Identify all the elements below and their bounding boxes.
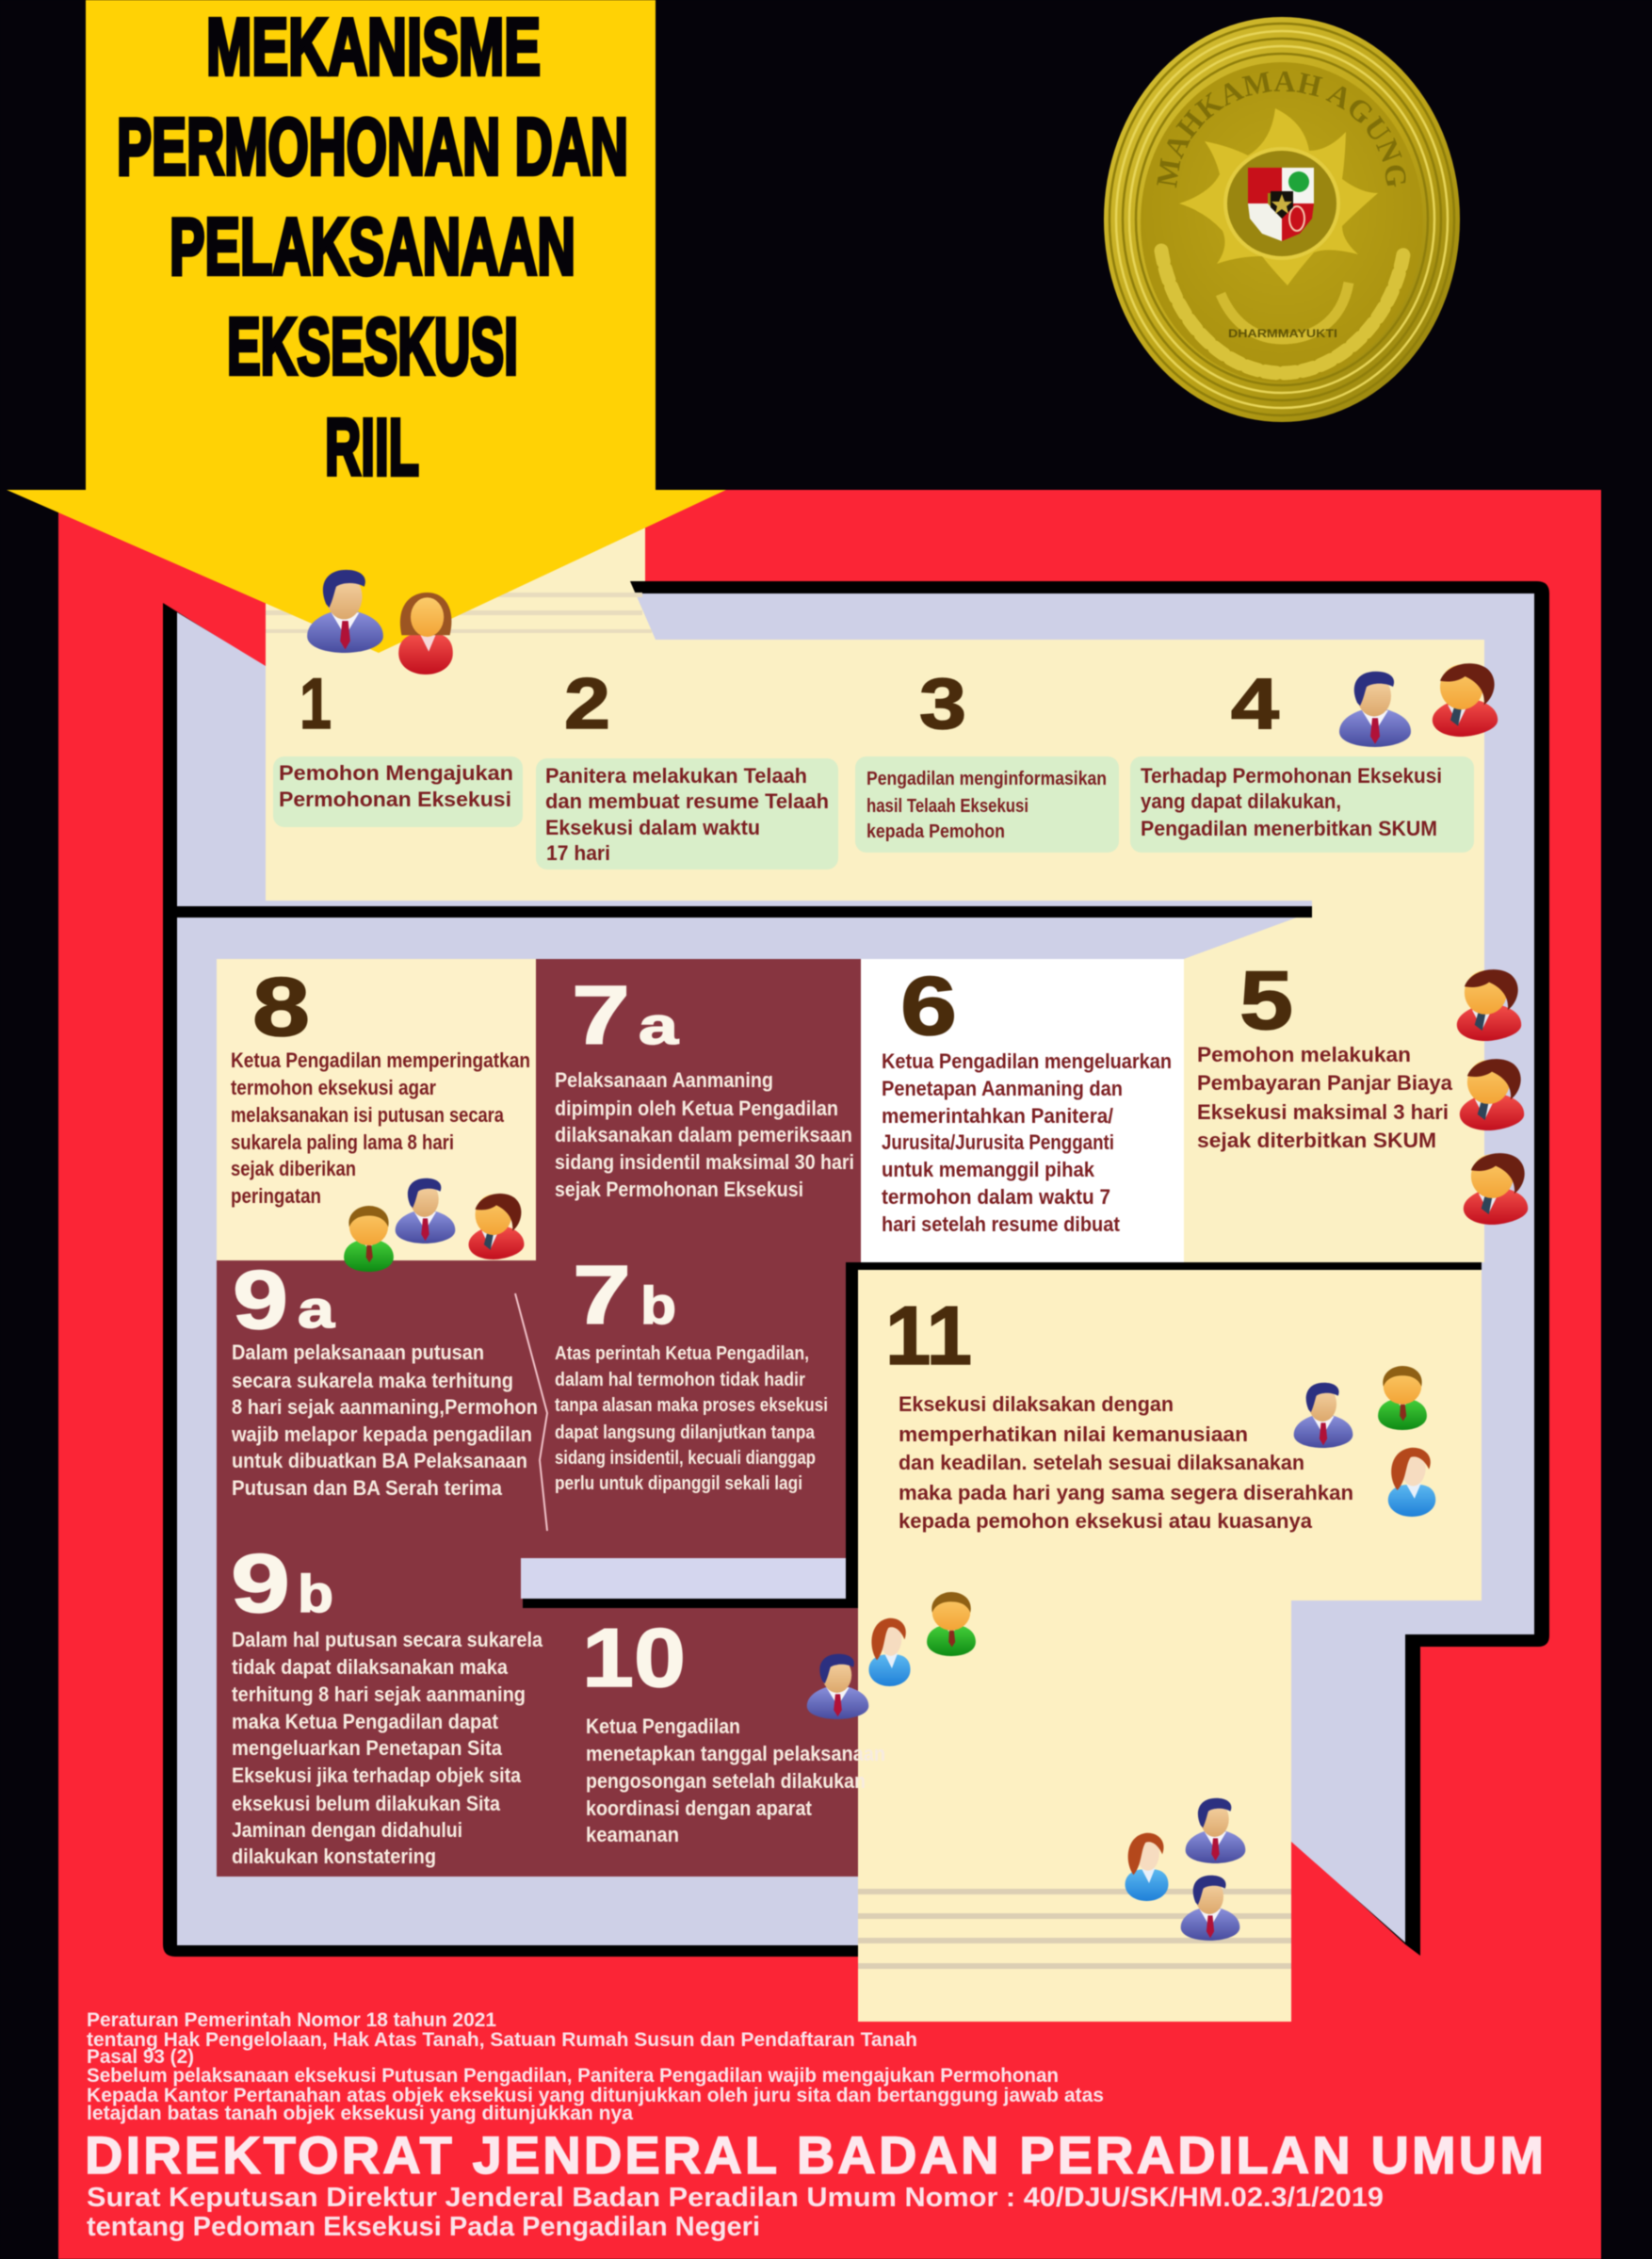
description: Atas perintah Ketua Pengadilan, <box>555 1343 809 1364</box>
icon: applicant pair at arrow tip <box>307 570 453 674</box>
footer reference text: Surat Keputusan Direktur Jenderal Badan Peradilan Umum Nomor : 40/DJU/SK/HM.02.3/1/2019 <box>87 2183 1384 2213</box>
description: dipimpin oleh Ketua Pengadilan <box>555 1097 838 1120</box>
inner motto ribbon <box>1221 283 1349 339</box>
maroon block top <box>536 959 861 1262</box>
number 5: 5 <box>1239 953 1293 1047</box>
panel: step 9b <box>231 1536 543 1868</box>
panel: step 1 <box>273 664 523 827</box>
title text: PELAKSANAAN <box>170 203 575 292</box>
description <box>231 1341 538 1500</box>
decorative stripes under arrow <box>266 593 652 633</box>
seal lettering path <box>1177 91 1386 188</box>
cream area: step 11 <box>858 1270 1482 2022</box>
description: tidak dapat dilaksanakan maka <box>232 1655 509 1679</box>
description: pengosongan setelah dilakukan <box>586 1769 866 1793</box>
description: perlu untuk dipanggil sekali lagi <box>555 1473 802 1494</box>
description: hasil Telaah Eksekusi <box>866 796 1028 817</box>
legal note text: Peraturan Pemerintah Nomor 18 tahun 2021 <box>87 2009 496 2031</box>
icons: three persons <box>1294 1366 1435 1517</box>
box: step 8 background <box>217 959 536 1260</box>
description: keamanan <box>586 1823 679 1846</box>
panel: step 11 <box>885 1289 1435 1533</box>
description <box>586 1715 885 1846</box>
title text: PERMOHONAN DAN <box>117 103 628 192</box>
description: dan membuat resume Telaah <box>545 789 829 813</box>
text box <box>855 756 1119 853</box>
description <box>279 761 513 811</box>
number 9b <box>231 1536 333 1630</box>
text box <box>273 756 523 827</box>
number 9b: 9 <box>231 1536 290 1630</box>
description: dalam hal termohon tidak hadir <box>555 1370 805 1390</box>
footer reference text <box>87 2183 1384 2242</box>
shield: red quarter with chain <box>1282 203 1314 241</box>
black frame outline <box>163 581 1549 1957</box>
seal outer disc <box>1104 17 1460 422</box>
legal note text: Pasal 93 (2) <box>87 2046 194 2068</box>
panel: step 7b <box>555 1248 828 1494</box>
description: maka pada hari yang sama segera diserahkan <box>899 1481 1353 1504</box>
icons: three persons <box>1457 969 1528 1225</box>
description: Eksekusi jika terhadap objek sita <box>232 1763 522 1787</box>
legal note text: Sebelum pelaksanaan eksekusi Putusan Pengadilan, Panitera Pengadilan wajib mengajukan Permohonan <box>87 2065 1059 2087</box>
description: sidang insidentil, kecuali dianggap <box>555 1448 816 1469</box>
description: Permohonan Eksekusi <box>279 788 511 811</box>
number 2: 2 <box>564 664 610 744</box>
description: sejak diberikan <box>231 1157 356 1180</box>
number 4: 4 <box>1231 664 1279 744</box>
panel: step 9a <box>231 1253 538 1500</box>
description: 8 hari sejak aanmaning,Permohon <box>232 1395 538 1419</box>
icons: group at bottom of cream column <box>1126 1798 1245 1941</box>
number 7b <box>573 1248 676 1341</box>
panel: step 2 <box>536 664 838 869</box>
description: koordinasi dengan aparat <box>586 1796 813 1820</box>
description: 17 hari <box>546 841 610 865</box>
legal note text: Kepada Kantor Pertanahan atas objek eksekusi yang ditunjukkan oleh juru sita dan bertanggung jawab atas <box>87 2085 1104 2106</box>
description: yang dapat dilakukan, <box>1141 789 1341 813</box>
description <box>866 769 1107 842</box>
description: Pemohon melakukan <box>1197 1043 1411 1066</box>
shield: white quarter with rice <box>1248 203 1282 241</box>
description <box>555 1068 854 1201</box>
description: termohon eksekusi agar <box>231 1076 436 1099</box>
description: peringatan <box>231 1184 321 1208</box>
number 11: 11 <box>885 1289 972 1382</box>
text box <box>1130 756 1474 853</box>
description: menetapkan tanggal pelaksanaan <box>586 1742 885 1765</box>
description <box>231 1048 530 1208</box>
description: Jaminan dengan didahului <box>232 1818 462 1842</box>
description: dapat langsung dilanjutkan tanpa <box>555 1422 816 1443</box>
panel: step 3 <box>855 664 1119 853</box>
emblem ring <box>1225 149 1338 258</box>
description: Panitera melakukan Telaah <box>545 764 807 788</box>
number 8: 8 <box>252 960 310 1053</box>
description: Putusan dan BA Serah terima <box>232 1476 503 1500</box>
description: hari setelah resume dibuat <box>882 1212 1121 1236</box>
black divider lines <box>176 906 1482 1608</box>
footer heading: DIREKTORAT JENDERAL BADAN PERADILAN UMUM <box>85 2125 1544 2185</box>
number 9a <box>233 1253 335 1346</box>
panel: step 10 <box>582 1592 976 1846</box>
description: Ketua Pengadilan mengeluarkan <box>882 1049 1172 1073</box>
description: memerintahkan Panitera/ <box>882 1104 1113 1128</box>
text box <box>536 758 838 869</box>
icons: three persons <box>344 1178 524 1272</box>
description: Jurusita/Jurusita Pengganti <box>882 1130 1114 1154</box>
description: Dalam pelaksanaan putusan <box>232 1341 484 1364</box>
description: melaksanakan isi putusan secara <box>231 1103 505 1127</box>
description: sidang insidentil maksimal 30 hari <box>555 1150 854 1174</box>
shield: centre with star <box>1271 191 1293 219</box>
sunburst emblem <box>1179 108 1378 285</box>
number 9a: 9 <box>233 1253 288 1346</box>
description: dan keadilan. setelah sesuai dilaksanakan <box>899 1451 1304 1474</box>
description: sejak Permohonan Eksekusi <box>555 1178 803 1201</box>
number 9b: b <box>298 1564 333 1623</box>
description: Pembayaran Panjar Biaya <box>1197 1071 1453 1095</box>
number 10: 10 <box>582 1611 686 1704</box>
legal note text: letajdan batas tanah objek eksekusi yang ditunjukkan nya <box>87 2103 633 2124</box>
description: Eksekusi dalam waktu <box>545 816 760 839</box>
motto text: DHARMMAYUKTI <box>1228 327 1337 340</box>
description <box>555 1343 828 1494</box>
title text: MEKANISME <box>206 3 541 92</box>
description: dilakukan konstatering <box>232 1845 436 1868</box>
legal note text: tentang Hak Pengelolaan, Hak Atas Tanah, Satuan Rumah Susun dan Pendaftaran Tanah <box>87 2029 917 2051</box>
description: Ketua Pengadilan memperingatkan <box>231 1048 530 1072</box>
description <box>232 1628 543 1868</box>
description: maka Ketua Pengadilan dapat <box>232 1710 499 1733</box>
arrow shape <box>7 0 726 653</box>
description: Dalam hal putusan secara sukarela <box>232 1628 543 1651</box>
lavender inset <box>521 1558 846 1599</box>
stripes at bottom of cream area <box>858 1889 1291 1969</box>
seal inner plate <box>1141 62 1423 382</box>
description: kepada pemohon eksekusi atau kuasanya <box>899 1509 1313 1533</box>
red panel <box>58 490 1601 2259</box>
number 7a <box>572 968 679 1062</box>
description: Pengadilan menerbitkan SKUM <box>1141 817 1437 840</box>
description: wajib melapor kepada pengadilan <box>231 1422 532 1446</box>
title text: RIIL <box>325 403 419 493</box>
panel: step 5 <box>1197 953 1528 1225</box>
description: untuk dibuatkan BA Pelaksanaan <box>232 1449 527 1472</box>
description <box>1141 764 1442 840</box>
description: Pemohon Mengajukan <box>279 761 513 785</box>
description: eksekusi belum dilakukan Sita <box>232 1792 501 1815</box>
seal rings <box>1109 24 1454 415</box>
description: Penetapan Aanmaning dan <box>882 1077 1123 1100</box>
title arrow <box>7 0 726 653</box>
shield: white quarter with tree <box>1282 168 1314 203</box>
lavender frame fill <box>177 593 1534 1945</box>
title text <box>117 3 628 493</box>
description: termohon dalam waktu 7 <box>882 1185 1110 1209</box>
footer reference text: tentang Pedoman Eksekusi Pada Pengadilan Negeri <box>87 2212 760 2242</box>
description: Pelaksanaan Aanmaning <box>555 1068 773 1092</box>
description: mengeluarkan Penetapan Sita <box>232 1736 503 1760</box>
description: sukarela paling lama 8 hari <box>231 1130 454 1154</box>
description <box>1197 1043 1453 1152</box>
cream area: steps 1 to 5 <box>266 509 1484 1262</box>
seal: Mahkamah Agung <box>1103 16 1461 423</box>
description: terhitung 8 hari sejak aanmaning <box>232 1682 526 1706</box>
description <box>899 1392 1353 1533</box>
wreath <box>1161 251 1403 373</box>
description: untuk memanggil pihak <box>882 1158 1095 1181</box>
description <box>545 764 829 865</box>
description <box>882 1049 1172 1236</box>
number 1: 1 <box>300 664 332 744</box>
description: secara sukarela maka terhitung <box>232 1369 513 1392</box>
shield: red quarter <box>1248 168 1282 203</box>
number 7a: a <box>639 996 679 1055</box>
description: Eksekusi maksimal 3 hari <box>1197 1100 1449 1124</box>
icons: two persons <box>1339 663 1498 747</box>
description: sejak diterbitkan SKUM <box>1197 1129 1436 1152</box>
number 7a: 7 <box>572 968 630 1062</box>
number 6: 6 <box>900 959 957 1052</box>
number 7b: 7 <box>573 1248 631 1341</box>
panel: step 7a <box>555 968 854 1201</box>
icons: three persons <box>807 1592 976 1719</box>
panel: step 6 <box>882 959 1172 1236</box>
number 3: 3 <box>919 664 966 744</box>
legal note text <box>87 2009 1104 2124</box>
description: Ketua Pengadilan <box>586 1715 740 1738</box>
box: step 6 background <box>861 959 1184 1262</box>
seal lettering: MAHKAMAH AGUNG <box>1157 72 1406 188</box>
panel: step 8 <box>231 960 530 1272</box>
description: memperhatikan nilai kemanusiaan <box>899 1422 1248 1446</box>
number 7b: b <box>640 1276 676 1335</box>
maroon block bottom <box>217 1260 858 1877</box>
description: tanpa alasan maka proses eksekusi <box>555 1395 828 1416</box>
panel: step 4 <box>1130 663 1498 853</box>
description: Terhadap Permohonan Eksekusi <box>1141 764 1442 788</box>
description: dilaksanakan dalam pemeriksaan <box>555 1123 852 1146</box>
title text: EKSESKUSI <box>227 302 518 392</box>
separator line between 9a and 7b <box>515 1293 547 1531</box>
description: Eksekusi dilaksakan dengan <box>899 1392 1174 1416</box>
description: kepada Pemohon <box>866 821 1005 842</box>
number 9a: a <box>298 1279 335 1339</box>
description: Pengadilan menginformasikan <box>866 769 1107 789</box>
